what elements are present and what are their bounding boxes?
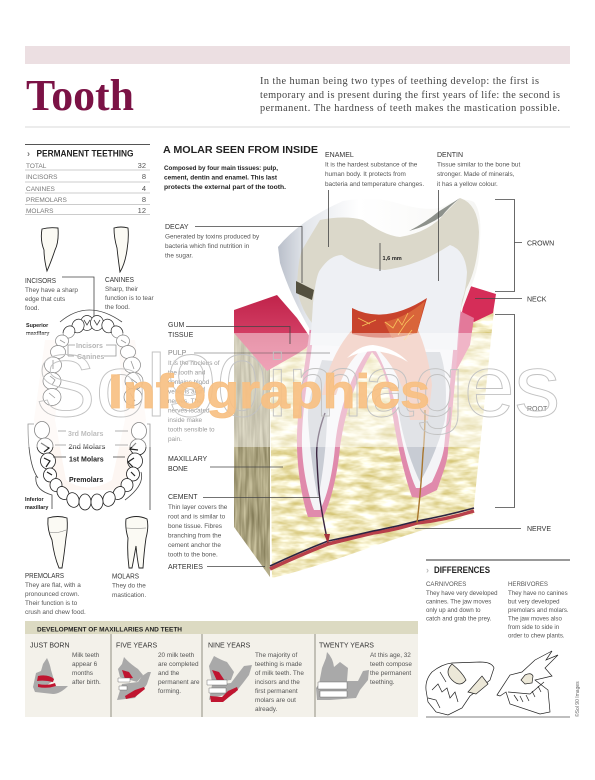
jaw icon [316, 652, 369, 700]
label: gum tissue [168, 322, 290, 344]
icon: carnivore skull [426, 662, 494, 715]
roots cementum [297, 300, 462, 517]
text: molars [112, 574, 146, 599]
enamel cut face [297, 198, 479, 328]
text: carnivores: only up and down to [426, 607, 481, 614]
stage: twenty years: the permanent [370, 670, 411, 677]
intro text: In the human being two types of teething develop: the first is [260, 76, 539, 87]
text: composed: protects the external part of the tooth. [164, 184, 286, 191]
text: incisors: edge that cuts [25, 296, 65, 303]
stage: just born: appear 6 [72, 661, 98, 668]
label: cement: tooth to the bone. [168, 552, 218, 558]
panel: permanent teething table: INCISORS [26, 174, 58, 181]
icon: premolar tooth [48, 516, 67, 568]
decay [296, 281, 314, 300]
illustration: molar cross-section [234, 198, 496, 578]
lower teeth [34, 422, 146, 510]
label: cement: bone tissue. Fibres [168, 523, 222, 530]
stage: five years: 20 milk teeth [158, 652, 195, 659]
stage: five years: forming. [158, 688, 181, 695]
label: dentin: DENTIN [437, 152, 463, 159]
differences heading: › [426, 565, 429, 575]
label: enamel: ENAMEL [325, 152, 354, 159]
text: canines: CANINES [105, 277, 134, 284]
heading: a molar seen from inside: A MOLAR SEEN FROM INSIDE [163, 145, 318, 156]
text: herbivores: but very developed [508, 598, 560, 606]
label: dentin: Tissue similar to the bone but [437, 162, 520, 168]
label: pulp: nerves. The [168, 398, 202, 405]
stage: five years: FIVE YEARS [116, 642, 157, 650]
text: molars: They do the [112, 582, 146, 590]
arch labels: 1st Molars [69, 456, 104, 464]
label: root [495, 314, 548, 508]
text: incisors: INCISORS [25, 278, 56, 285]
dental arch diagram [25, 310, 150, 511]
label: decay: bacteria which find nutrition in [165, 243, 250, 250]
stage: twenty years: teething. [370, 679, 395, 686]
watermark: Sol90images [35, 336, 560, 435]
label: pulp: It is the nucleus of [168, 360, 220, 367]
gum [234, 295, 312, 371]
stage: five years [116, 642, 200, 700]
nerve [270, 508, 474, 566]
label: measurement [380, 243, 402, 271]
arch labels: Inferior [25, 497, 44, 503]
label: gum tissue: GUM [168, 322, 184, 329]
jaw icon [207, 656, 252, 702]
jaw icon [117, 657, 151, 700]
text: carnivores: They have very developed [426, 590, 497, 597]
icon: canine tooth [114, 227, 128, 272]
bone front face [270, 310, 494, 578]
root dentin [302, 300, 458, 510]
stage: nine years: already. [255, 706, 277, 713]
text: composed [164, 165, 286, 191]
label: cement: root and is similar to [168, 514, 226, 520]
watermark band [0, 333, 595, 447]
label: dentin [437, 152, 520, 281]
arch labels: 2nd Molars [68, 444, 106, 451]
label: pulp: pain. [168, 436, 182, 443]
pulp chamber [352, 298, 427, 338]
label: arteries: ARTERIES [168, 564, 203, 571]
text: composed: cement, dentin and enamel. This last [164, 174, 278, 182]
text: premolars [25, 573, 86, 616]
text: canines: function is to tear [105, 295, 155, 302]
label: cement: branching from the [168, 532, 222, 540]
label: dentin: it has a yellow colour. [437, 181, 498, 188]
intro text [260, 76, 560, 114]
label: enamel: It is the hardest substance of the [325, 162, 418, 168]
stage: nine years: The majority of [255, 652, 297, 659]
arch glow [34, 340, 146, 490]
label: decay: the sugar. [165, 252, 193, 260]
panel: permanent teething table: 8 [142, 172, 146, 181]
text: incisors: They have a sharp [25, 287, 78, 294]
arch labels: Canines [77, 354, 104, 361]
root canal right [398, 352, 446, 482]
text: premolars: Their function is to [25, 600, 78, 607]
label: pulp: inside make [168, 417, 203, 424]
stage: twenty years [316, 642, 412, 700]
table heading: › [27, 148, 30, 158]
credit: ©Sol 90 Images [574, 681, 581, 717]
text: incisors: food. [25, 305, 39, 312]
label: pulp: contains blood [168, 379, 210, 386]
panel: permanent teething table: PREMOLARS [26, 197, 67, 204]
panel: permanent teething table: 32 [138, 161, 146, 170]
header band [25, 46, 570, 64]
label: cement: CEMENT [168, 494, 198, 501]
arch labels: maxillary [25, 505, 48, 511]
label: pulp: PULP [168, 350, 187, 357]
stage: just born: JUST BORN [30, 642, 70, 650]
nerve branch right [417, 410, 425, 523]
enamel outer [278, 199, 480, 330]
icon: molar tooth [126, 516, 148, 568]
text: herbivores: order to chew plants. [508, 632, 565, 640]
stage: just born [30, 642, 101, 694]
label: cement [168, 494, 320, 558]
text: carnivores: canines. The jaw moves [426, 598, 491, 606]
label: cement: Thin layer covers the [168, 504, 228, 511]
watermark: Infographics [108, 366, 430, 419]
root canal left [308, 360, 346, 498]
panel: permanent teething table [25, 144, 150, 215]
label: root: ROOT [527, 406, 548, 413]
pulp pale band [322, 330, 432, 420]
label: maxillary bone [168, 456, 283, 473]
upper teeth [43, 316, 143, 406]
text: carnivores: catch and grab the prey. [426, 616, 492, 622]
arteries [270, 511, 474, 569]
text: herbivores: from side to side in [508, 624, 559, 631]
gum right lower [454, 310, 474, 375]
arch labels [25, 323, 106, 511]
label: neck: NECK [527, 296, 547, 304]
panel: permanent teething table: 12 [138, 206, 146, 215]
intro text: permanent. The hardness of teeth makes the mastication possible. [260, 103, 560, 114]
arch labels: 3rd Molars [68, 431, 104, 438]
stage: twenty years: teeth compose [370, 661, 412, 668]
nerve branch left [317, 413, 328, 543]
arch labels: maxillary [26, 331, 49, 337]
text: herbivores: premolars and molars. [508, 607, 569, 614]
text: herbivores: They have no canines [508, 590, 568, 597]
label: pulp: tooth sensible to [168, 426, 215, 434]
stage: just born: Milk teeth [72, 652, 100, 659]
text: herbivores: The jaw moves also [508, 616, 562, 622]
label: pulp: vessels and [168, 388, 202, 396]
label: pulp: nerves located [168, 408, 210, 414]
stage: nine years: first permanent [255, 688, 298, 695]
label: maxillary bone: BONE [168, 466, 188, 473]
label: enamel: bacteria and temperature changes. [325, 181, 424, 188]
text: incisors [25, 278, 78, 312]
panel: permanent teething table: TOTAL [26, 163, 47, 170]
label: enamel: human body. It protects from [325, 171, 406, 178]
stage: nine years: NINE YEARS [208, 642, 251, 650]
text: herbivores: HERBIVORES [508, 581, 548, 588]
stage: five years: are completed [158, 661, 199, 668]
label: maxillary bone: MAXILLARY [168, 456, 207, 463]
label: decay [165, 224, 302, 283]
text: canines [105, 277, 155, 311]
panel: permanent teething table: MOLARS [26, 208, 54, 215]
text: molars: MOLARS [112, 574, 139, 580]
text: canines: the food. [105, 304, 130, 311]
table heading: PERMANENT TEETHING [36, 148, 134, 158]
label: crown [495, 200, 554, 292]
panel heading: DEVELOPMENT OF MAXILLARIES AND TEETH [37, 626, 182, 634]
intro text: temporary and is present during the first years of life: the second is [260, 90, 560, 101]
text: premolars: They are flat, with a [25, 582, 81, 589]
stage: nine years: teething is made [255, 661, 302, 668]
icon: incisor tooth [41, 228, 58, 271]
panel: permanent teething table: 8 [142, 195, 146, 204]
label: crown: CROWN [527, 240, 554, 248]
label: pulp [168, 350, 330, 443]
stage: just born: months [72, 670, 93, 677]
enamel shading [409, 198, 460, 231]
text: carnivores: CARNIVORES [426, 581, 466, 588]
label: decay: DECAY [165, 224, 189, 231]
label: gum tissue: TISSUE [168, 332, 194, 339]
label: arteries [168, 564, 265, 571]
stage: nine years [207, 642, 304, 713]
text: composed: Composed by four main tissues: pulp, [164, 165, 278, 172]
furcation highlight [347, 345, 408, 362]
label: enamel [325, 152, 424, 247]
stage: five years: and the [158, 670, 180, 677]
text: premolars: crush and chew food. [25, 609, 86, 616]
text: carnivores [426, 581, 497, 622]
differences heading: DIFFERENCES [434, 565, 490, 575]
stage: five years: permanent are [158, 679, 200, 686]
panel: permanent teething table: CANINES [26, 186, 56, 193]
text: herbivores [508, 581, 569, 640]
pulp vessels [358, 313, 414, 340]
text: premolars: PREMOLARS [25, 573, 64, 580]
panel: permanent teething table: 4 [142, 184, 146, 193]
label: dentin: stronger. Made of minerals, [437, 171, 515, 178]
stage: nine years: of milk teeth. The [255, 670, 304, 677]
panel: differences [426, 560, 570, 717]
stage: nine years: incisors and the [255, 679, 300, 686]
arch labels: Premolars [69, 477, 103, 484]
label: pulp: the tooth and [168, 370, 206, 376]
dentin crown [310, 245, 467, 350]
icon: herbivore skull [497, 651, 558, 714]
jaw icon [33, 658, 68, 694]
panel: development of maxillaries and teeth [25, 621, 418, 717]
label: measurement: 1,6 mm [382, 256, 402, 262]
lower brackets [28, 424, 150, 510]
text: molars: mastication. [112, 592, 146, 599]
stage: just born: after birth. [72, 679, 101, 686]
stage: nine years: molars are out [255, 697, 296, 704]
arch labels: Incisors [76, 343, 103, 350]
title: Tooth [26, 71, 134, 120]
bone side face [234, 325, 270, 577]
stage: twenty years: At this age, 32 [370, 652, 411, 659]
upper arch bracket [60, 310, 122, 322]
label: cement: cement anchor the [168, 542, 221, 549]
label: nerve [415, 526, 551, 533]
stage: twenty years: TWENTY YEARS [319, 642, 374, 650]
label: neck [475, 296, 547, 304]
text: premolars: pronounced crown. [25, 591, 80, 598]
label: nerve: NERVE [527, 526, 551, 533]
arch labels: Superior [26, 323, 49, 329]
label: decay: Generated by toxins produced by [165, 234, 260, 240]
text: canines: Sharp, their [105, 286, 139, 293]
